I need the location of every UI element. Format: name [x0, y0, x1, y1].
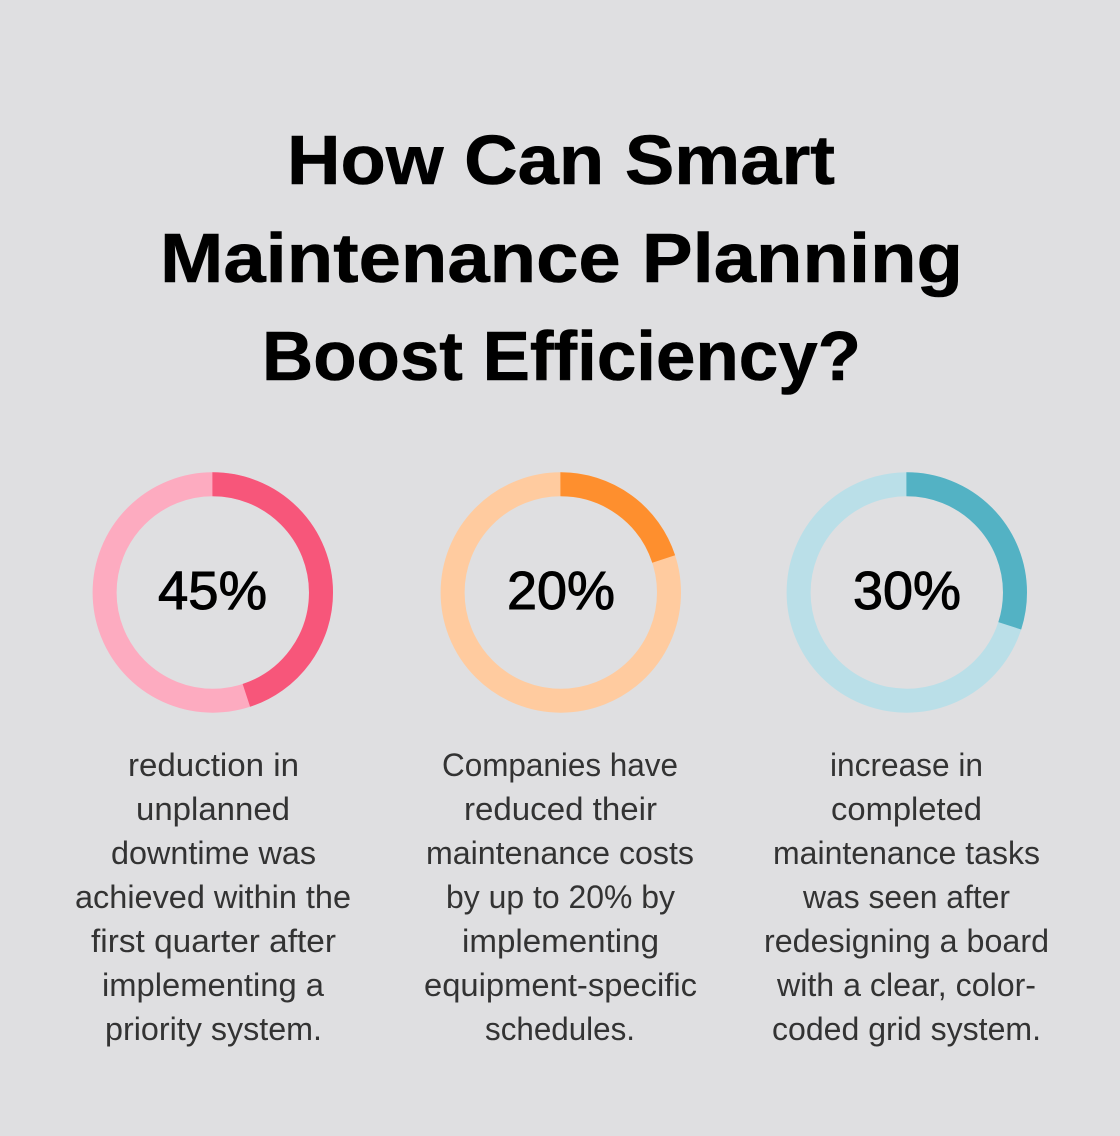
description: cost reduction: reduced their: [464, 791, 657, 827]
description: downtime reduction: achieved within the: [75, 879, 351, 915]
stat: 45%: 45%: [158, 561, 267, 621]
description: cost reduction: equipment-specific: [424, 967, 697, 1003]
description: cost reduction: schedules.: [485, 1011, 635, 1047]
description: downtime reduction: [75, 747, 351, 1047]
description: downtime reduction: implementing a: [102, 967, 324, 1003]
title: [160, 121, 963, 395]
description: completed tasks: redesigning a board: [764, 923, 1049, 959]
description: completed tasks: coded grid system.: [772, 1011, 1041, 1047]
title: Boost Efficiency?: [262, 317, 861, 395]
description: completed tasks: with a clear, color-: [776, 967, 1036, 1003]
stat: 30%: 30%: [853, 561, 961, 621]
description: completed tasks: maintenance tasks: [773, 835, 1040, 871]
description: cost reduction: [424, 747, 697, 1047]
description: cost reduction: implementing: [462, 923, 659, 959]
description: downtime reduction: downtime was: [111, 835, 316, 871]
title: How Can Smart: [287, 121, 835, 199]
donut chart: 45%: [105, 484, 321, 701]
description: downtime reduction: reduction in: [128, 747, 299, 783]
description: completed tasks: completed: [831, 791, 982, 827]
title: Maintenance Planning: [160, 219, 963, 297]
panel: 30% completed tasks: [764, 484, 1049, 1047]
panel: 45% downtime reduction: [75, 484, 351, 1047]
description: completed tasks: was seen after: [802, 879, 1010, 915]
description: cost reduction: by up to 20% by: [446, 879, 675, 915]
description: completed tasks: increase in: [830, 747, 983, 783]
stat: 20%: 20%: [507, 561, 615, 621]
panel: 20% cost reduction: [424, 484, 697, 1047]
description: cost reduction: maintenance costs: [426, 835, 694, 871]
donut chart: 20%: [453, 484, 669, 701]
description: cost reduction: Companies have: [442, 747, 678, 783]
description: downtime reduction: first quarter after: [91, 923, 336, 959]
description: completed tasks: [764, 747, 1049, 1047]
description: downtime reduction: priority system.: [105, 1011, 322, 1047]
description: downtime reduction: unplanned: [136, 791, 290, 827]
donut chart: 30%: [799, 484, 1015, 701]
